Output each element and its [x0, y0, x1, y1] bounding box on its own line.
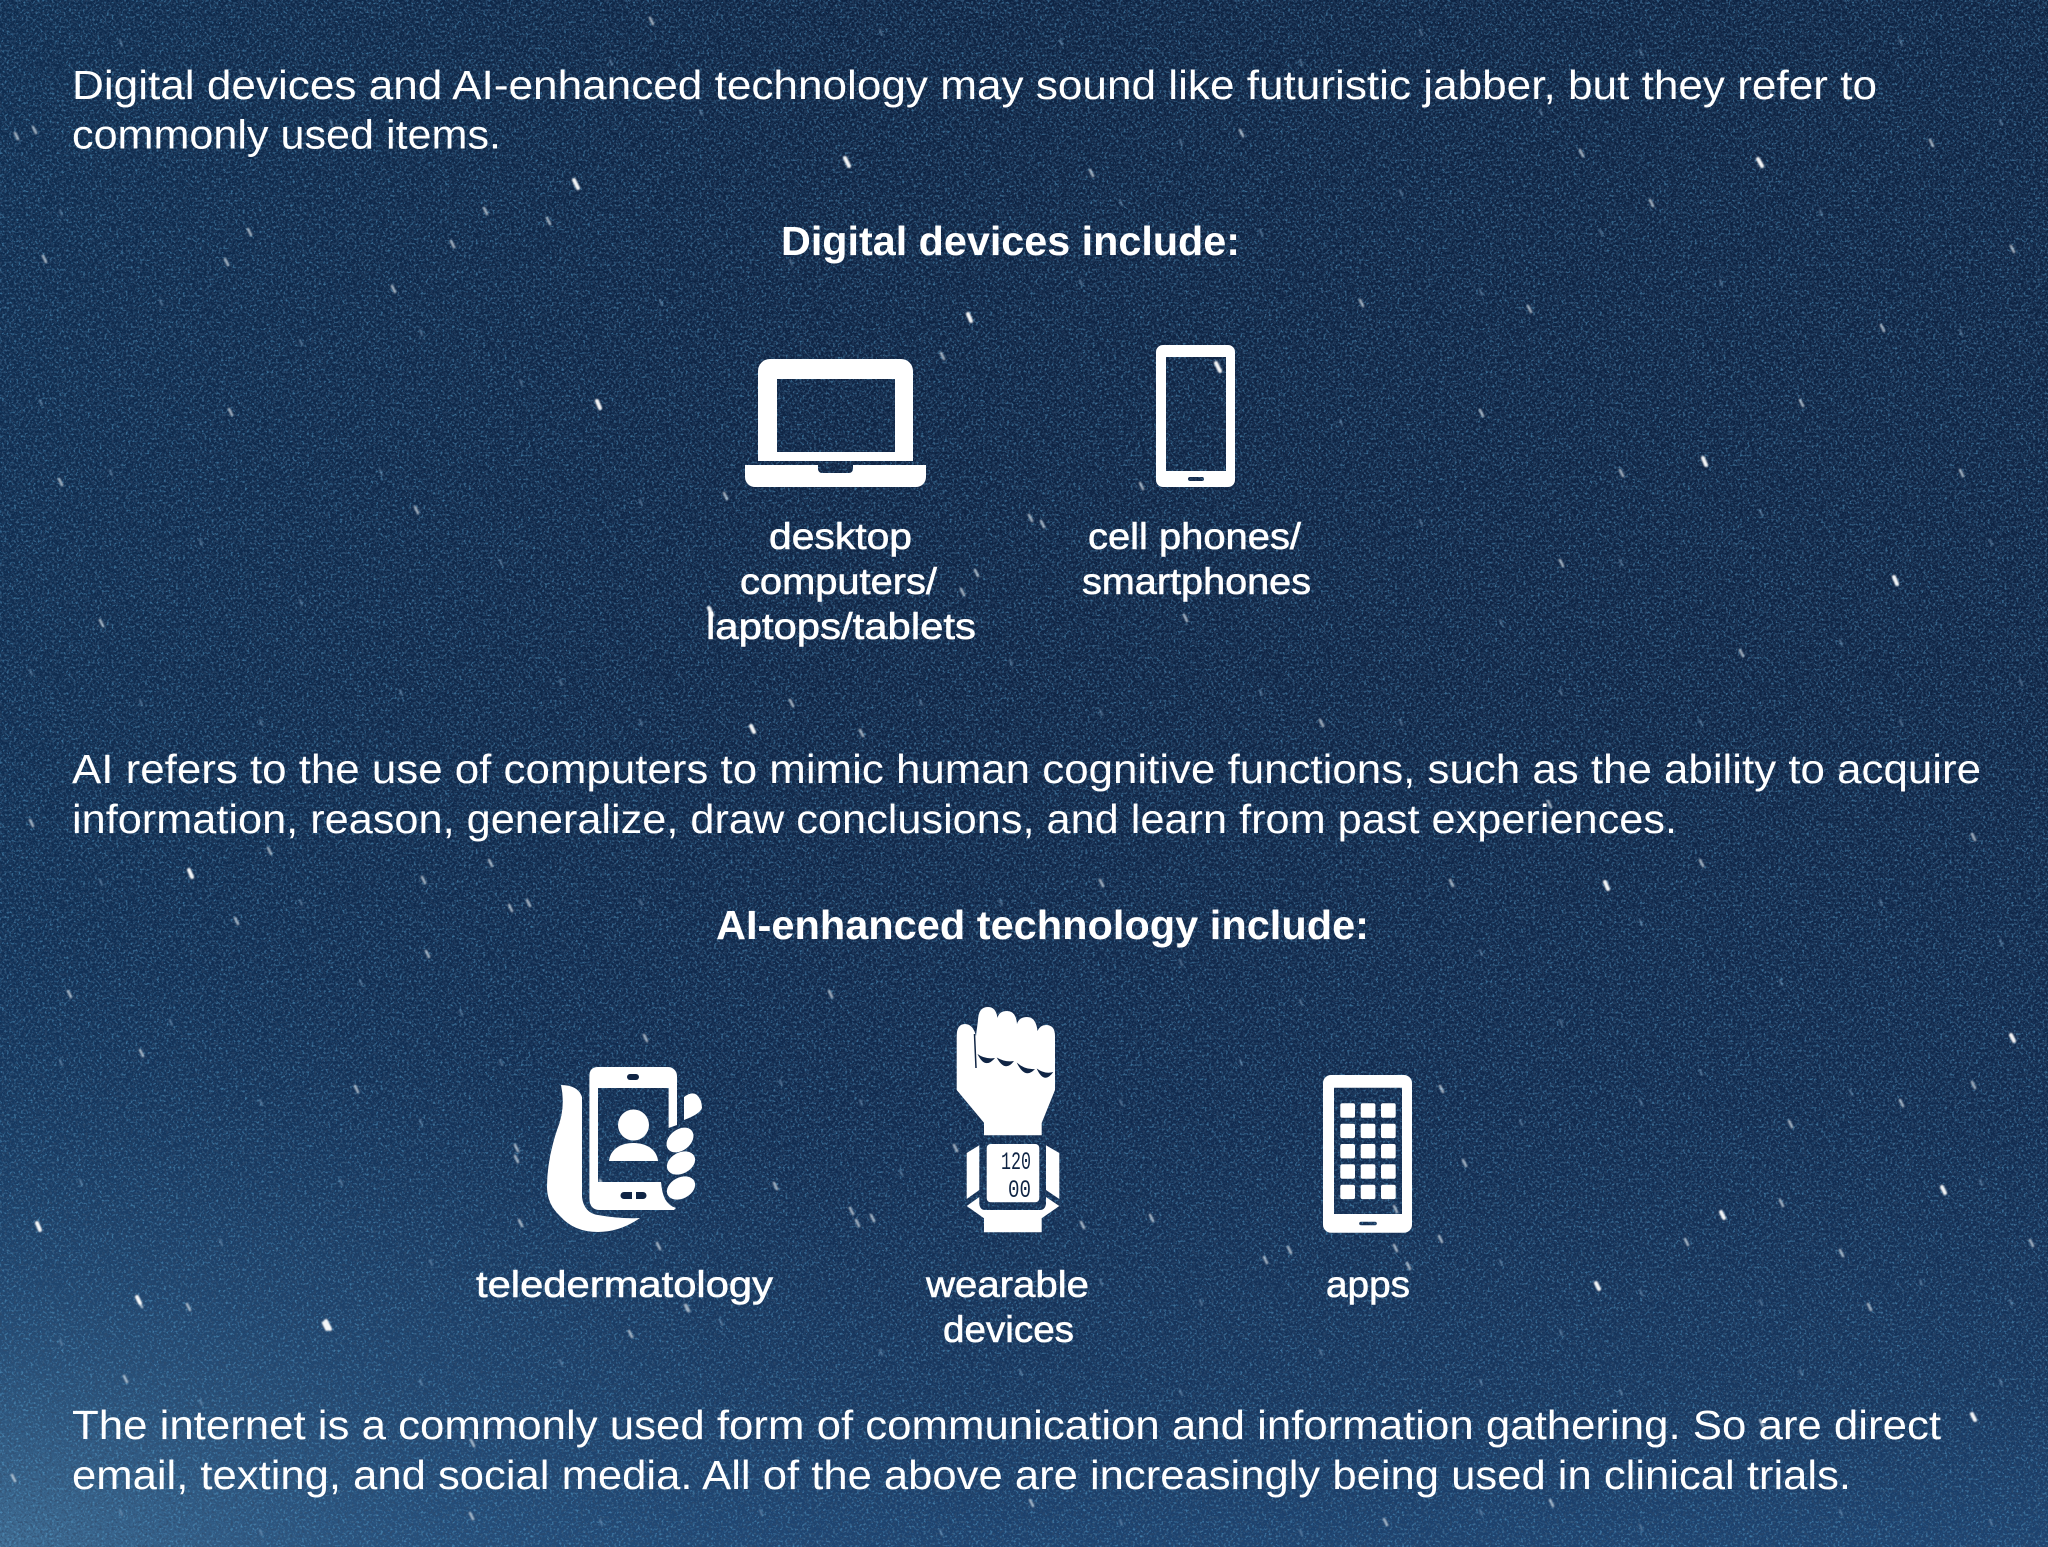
text block: AI definition [72, 746, 1981, 842]
label: wearable devices [925, 1264, 1089, 1350]
label: wearable devices: wearable [925, 1264, 1089, 1305]
label: desktop computers, laptops, tablets: desktop [769, 516, 912, 557]
label: cell phones, smartphones: smartphones [1082, 561, 1311, 602]
label: desktop computers, laptops, tablets: laptops/tablets [706, 606, 976, 647]
text block: AI definition: information, reason, generalize, draw conclusions, and learn from past experiences. [72, 796, 1677, 842]
icon: wrist blood pressure monitor: 00 [1008, 1176, 1031, 1205]
label: desktop computers, laptops, tablets [706, 516, 976, 647]
heading: AI-enhanced technology: AI-enhanced technology include: [716, 902, 1369, 948]
icon: wrist blood pressure monitor [957, 1007, 1059, 1232]
text block: internet and communication [72, 1402, 1942, 1498]
label: wearable devices: devices [943, 1309, 1074, 1350]
label: teledermatology: teledermatology [476, 1264, 774, 1305]
heading: digital devices: Digital devices include: [781, 218, 1240, 264]
label: desktop computers, laptops, tablets: computers/ [740, 561, 938, 602]
text block: internet and communication: The internet is a commonly used form of communication and information gathering. So are direct [72, 1402, 1942, 1448]
label: apps: apps [1326, 1264, 1410, 1305]
text block: intro paragraph: Digital devices and AI-enhanced technology may sound like futuristic jabber, but they refer to [72, 62, 1877, 108]
icon: wrist blood pressure monitor: 120 [1001, 1148, 1031, 1177]
text block: AI definition: AI refers to the use of computers to mimic human cognitive functions, such as the ability to acquire [72, 746, 1981, 792]
icon: hand holding phone with person on screen [547, 1067, 702, 1232]
icon: tablet with app grid [1323, 1075, 1412, 1233]
icon: smartphone [1156, 345, 1235, 487]
label: cell phones, smartphones [1082, 516, 1311, 602]
text block: intro paragraph: commonly used items. [72, 112, 501, 158]
label: cell phones, smartphones: cell phones/ [1088, 516, 1302, 557]
icon: laptop [745, 359, 926, 487]
text block: intro paragraph [72, 62, 1877, 158]
text block: internet and communication: email, texting, and social media. All of the above are increasingly being used in clinical trials. [72, 1452, 1851, 1498]
